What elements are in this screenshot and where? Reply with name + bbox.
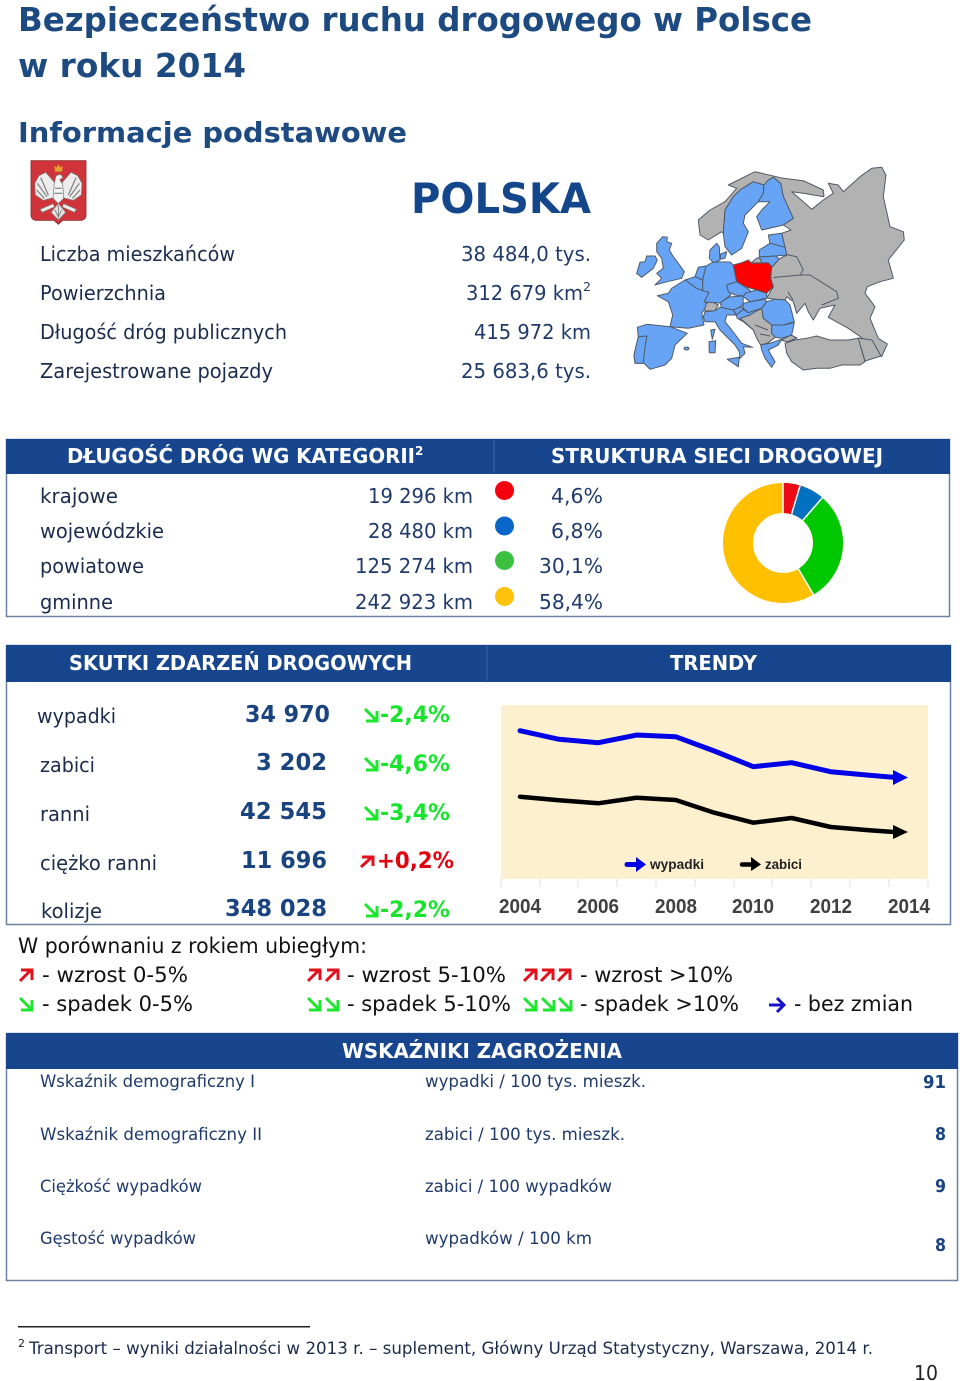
road category rows: 125 274 km — [355, 554, 473, 578]
panel header: DŁUGOŚĆ DRÓG WG KATEGORII — [67, 444, 415, 468]
heading: informacje podstawowe: Informacje podstawowe — [18, 116, 407, 149]
year axis labels: 2012 — [810, 896, 852, 918]
road category rows: 242 923 km — [355, 590, 473, 614]
donut chart — [738, 483, 828, 595]
road category rows — [40, 484, 603, 614]
arrow legend: W porównaniu z rokiem ubiegłym: — [18, 934, 367, 958]
indicator rows: Wskaźnik demograficzny I — [40, 1072, 255, 1092]
row: wypadki: 34 970 — [245, 702, 330, 728]
footnote: 2 — [18, 1337, 25, 1350]
arrow legend: - wzrost 0-5% — [42, 963, 188, 987]
panel header: SKUTKI ZDARZEŃ DROGOWYCH — [69, 651, 412, 675]
footnote — [18, 1326, 873, 1359]
row: kolizje — [41, 896, 450, 923]
road category rows: wojewódzkie — [40, 519, 164, 543]
poland highlighted — [733, 260, 773, 293]
row: zabici: -4,6% — [380, 752, 450, 777]
indicator rows: 9 — [935, 1176, 946, 1197]
indicator rows: Wskaźnik demograficzny II — [40, 1125, 262, 1145]
row: kolizje: kolizje — [41, 899, 102, 923]
row: wypadki: wypadki — [37, 704, 116, 728]
panel: consequences and trends — [6, 645, 951, 924]
row: ciezko ranni: +0,2% — [377, 849, 454, 874]
basic information rows: 38 484,0 tys. — [461, 242, 591, 266]
row: kolizje: -2,2% — [380, 898, 450, 923]
year axis labels — [499, 896, 931, 918]
chart legend: zabici — [765, 856, 802, 872]
footnote: Transport – wyniki działalności w 2013 r. – suplement, Główny Urząd Statystyczny, Warszawa, 2014 r. — [28, 1339, 873, 1359]
panel header: 2 — [415, 444, 423, 458]
arrow legend — [18, 934, 913, 1016]
basic information rows: Liczba mieszkańców — [40, 242, 235, 266]
line: wypadki — [520, 731, 908, 785]
title: w roku 2014 — [18, 46, 246, 85]
indicator rows: Gęstość wypadków — [40, 1229, 196, 1249]
basic information rows: 312 679 km — [466, 281, 583, 305]
basic information rows — [40, 242, 591, 383]
row: ranni: -3,4% — [380, 801, 450, 826]
road category rows: gminne — [40, 590, 113, 614]
year axis labels: 2004 — [499, 896, 542, 918]
chart legend — [627, 856, 802, 872]
panel header — [6, 1033, 958, 1069]
indicator rows: zabici / 100 wypadków — [425, 1177, 612, 1197]
basic information rows: 25 683,6 tys. — [461, 359, 591, 383]
indicator rows: Ciężkość wypadków — [40, 1177, 202, 1197]
panel header: TRENDY — [670, 651, 757, 675]
indicator rows: zabici / 100 tys. mieszk. — [425, 1125, 625, 1145]
road category rows: krajowe — [40, 484, 118, 508]
year axis labels: 2006 — [577, 896, 619, 918]
row: wypadki — [37, 702, 450, 728]
row: ranni: ranni — [40, 802, 90, 826]
indicator rows: 91 — [923, 1072, 946, 1093]
title: Bezpieczeństwo ruchu drogowego w Polsce — [18, 0, 812, 39]
panel header: STRUKTURA SIECI DROGOWEJ — [551, 444, 883, 468]
row: wypadki: -2,4% — [380, 703, 450, 728]
basic information rows: 2 — [583, 280, 591, 294]
row: ciezko ranni: 11 696 — [241, 848, 327, 874]
arrow legend: - spadek 0-5% — [42, 992, 193, 1016]
chart legend: wypadki — [649, 856, 704, 872]
road category rows: 19 296 km — [368, 484, 473, 508]
panel: risk indicators — [6, 1033, 958, 1280]
panel header — [6, 439, 950, 474]
arrow legend: - spadek 5-10% — [347, 992, 511, 1016]
heading: polska: POLSKA — [411, 174, 591, 223]
arrow legend: - wzrost >10% — [580, 963, 733, 987]
arrow legend: - wzrost 5-10% — [347, 963, 506, 987]
legend dots — [495, 481, 514, 606]
indicator rows: 8 — [935, 1124, 946, 1145]
basic information rows: Długość dróg publicznych — [40, 320, 287, 344]
panel header — [6, 645, 951, 682]
indicator rows: 8 — [935, 1235, 946, 1256]
road category rows: 4,6% — [551, 484, 603, 508]
panel header: WSKAŹNIKI ZAGROŻENIA — [342, 1039, 623, 1063]
road category rows: powiatowe — [40, 554, 144, 578]
map of europe — [634, 167, 904, 370]
icon: polish coat of arms — [31, 161, 86, 224]
indicator rows: wypadków / 100 km — [425, 1229, 592, 1249]
year axis labels: 2010 — [732, 896, 774, 918]
basic information rows: Zarejestrowane pojazdy — [40, 359, 273, 383]
road category rows: 58,4% — [539, 590, 603, 614]
indicator rows: wypadki / 100 tys. mieszk. — [425, 1072, 646, 1092]
eu member states — [634, 177, 794, 369]
row: zabici: 3 202 — [256, 750, 327, 776]
road category rows: 28 480 km — [368, 519, 473, 543]
title — [18, 0, 812, 85]
row: ranni: 42 545 — [240, 799, 327, 825]
indicator rows — [40, 1072, 946, 1256]
year axis labels: 2008 — [655, 896, 697, 918]
row: ranni — [40, 799, 450, 826]
row: zabici — [40, 750, 450, 777]
arrow legend: - spadek >10% — [580, 992, 739, 1016]
row: ciezko ranni: ciężko ranni — [40, 851, 157, 875]
year axis labels: 2014 — [888, 896, 931, 918]
arrow legend: - bez zmian — [794, 992, 913, 1016]
road category rows: 6,8% — [551, 519, 603, 543]
basic information rows: 415 972 km — [474, 320, 591, 344]
panel: road length and network structure — [6, 439, 950, 616]
row: zabici: zabici — [40, 753, 95, 777]
road category rows: 30,1% — [539, 554, 603, 578]
trend line chart — [499, 705, 931, 918]
row: kolizje: 348 028 — [225, 896, 327, 922]
basic information rows: Powierzchnia — [40, 281, 166, 305]
line: zabici — [520, 797, 908, 839]
row: ciezko ranni — [40, 848, 454, 875]
